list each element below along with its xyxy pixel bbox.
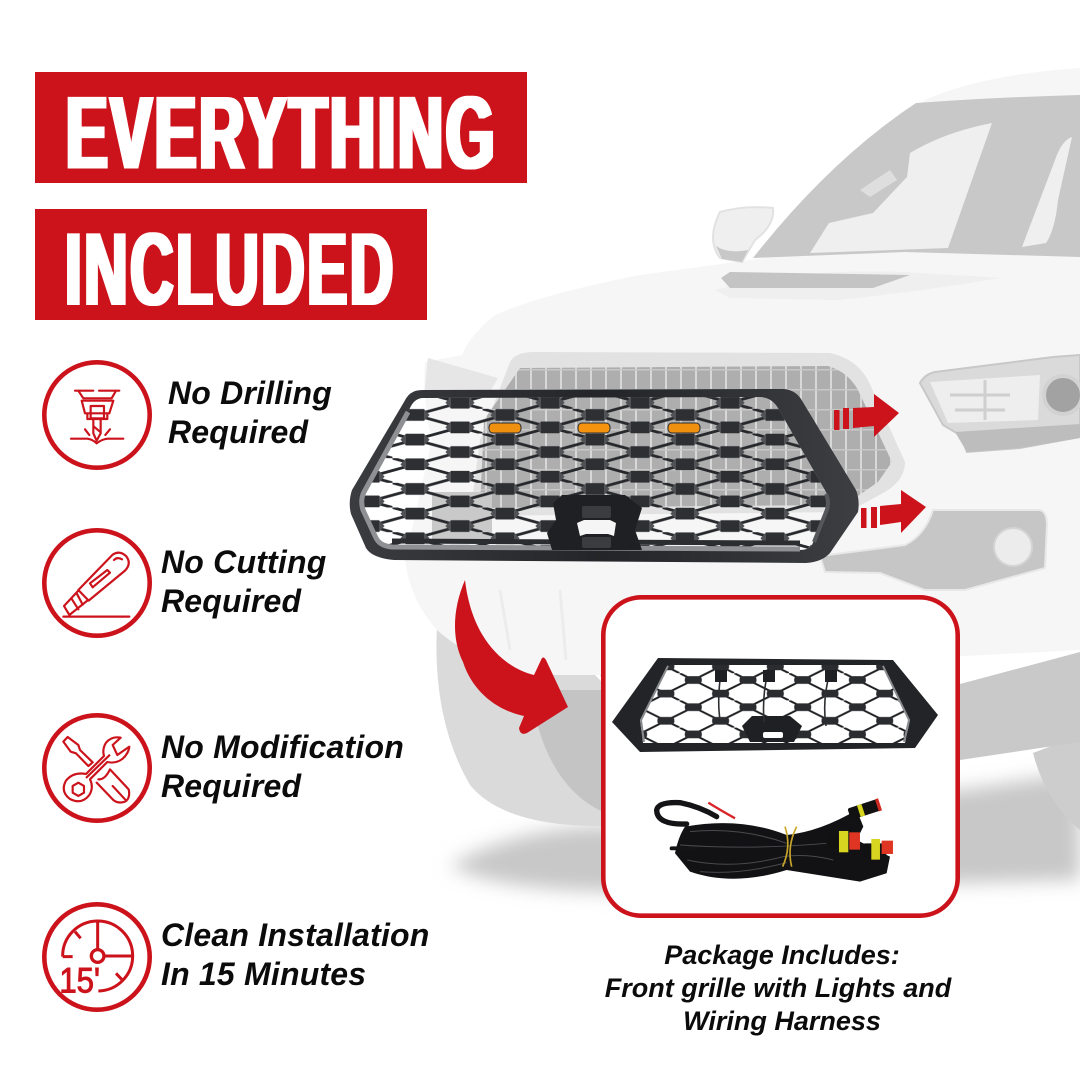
mirror base shade	[716, 246, 748, 262]
harness loose loop	[657, 803, 717, 848]
gold cable ties	[783, 827, 797, 867]
front left tyre	[436, 625, 640, 826]
headlamp chin	[955, 424, 1080, 452]
arrow: lower right	[861, 490, 926, 533]
package grille frame	[612, 658, 938, 752]
amber light left	[489, 423, 521, 433]
cable highlights	[680, 830, 833, 872]
windshield	[753, 95, 1080, 258]
grille lattice	[364, 397, 826, 549]
bumper recess lines	[500, 590, 566, 660]
package caption: Package Includes:	[664, 940, 900, 970]
windshield reflections	[810, 123, 1072, 253]
fog lamp lens	[994, 528, 1032, 566]
badge block top	[582, 506, 611, 518]
right headlamp	[920, 355, 1080, 452]
headlamp projector	[1044, 376, 1080, 414]
right inner lip	[814, 494, 828, 542]
truck background photo (ghosted)	[405, 68, 1080, 892]
feature: no modification	[44, 715, 404, 821]
package caption: Front grille with Lights and	[605, 973, 952, 1003]
label: no cutting: No Cutting	[161, 544, 326, 580]
heading: everything: EVERYTHING	[66, 75, 494, 192]
label: no modification: Required	[161, 768, 303, 804]
label: no drilling: Required	[168, 414, 310, 450]
amber light centre	[578, 423, 610, 433]
headlamp lens details	[950, 380, 1010, 420]
headlamp clear lens	[930, 375, 1040, 423]
light wires	[719, 672, 830, 726]
package grille badge	[742, 716, 802, 742]
truck body silhouette	[405, 68, 1080, 675]
feature: no drilling	[44, 362, 332, 468]
arrow: upper right	[834, 394, 899, 437]
package badge window	[763, 732, 783, 738]
rear-view mirror mount	[860, 170, 897, 197]
left headlamp	[424, 358, 498, 395]
light sockets	[715, 670, 837, 682]
curved arrow to package panel	[455, 580, 568, 734]
inner bottom dark rail	[392, 541, 800, 543]
label: no modification: No Modification	[161, 729, 404, 765]
icon: utility knife	[63, 553, 129, 617]
package grille	[610, 655, 940, 755]
under-bumper dark band	[600, 652, 1080, 760]
connector middle	[827, 831, 860, 852]
right tyre	[1033, 735, 1080, 830]
connector right	[863, 839, 893, 860]
label: no cutting: Required	[161, 583, 303, 619]
package caption: Wiring Harness	[683, 1006, 881, 1036]
grille inner grey lip	[362, 412, 800, 549]
red wire	[708, 803, 735, 818]
label: clean installation: Clean Installation	[161, 917, 430, 953]
connector top	[847, 798, 882, 820]
heading: included: INCLUDED	[65, 212, 393, 328]
icon: wrench and screwdriver	[63, 737, 129, 803]
package grille grey lip	[641, 666, 909, 742]
hood scoop	[721, 272, 910, 288]
icon: drill	[71, 391, 123, 443]
side mirror	[713, 207, 773, 262]
truck grille slats	[480, 366, 892, 508]
wiring harness	[657, 798, 893, 882]
grille product photo	[350, 385, 860, 565]
grille surround	[470, 352, 905, 516]
badge block bottom	[582, 537, 611, 548]
hood bulge shading	[715, 271, 1000, 300]
grille outer frame	[350, 389, 859, 563]
ground shadow	[450, 772, 1080, 892]
icon: clock 15 minutes: 15'	[59, 961, 100, 1000]
panel: package contents	[603, 597, 958, 916]
harness cable mass	[675, 810, 890, 882]
lower intake and fog housing	[820, 510, 1047, 590]
feature: clean installation	[44, 904, 430, 1010]
centre badge mount	[547, 495, 642, 550]
label: clean installation: In 15 Minutes	[161, 956, 366, 992]
label: no drilling: No Drilling	[168, 375, 332, 411]
inner wheel arch	[530, 690, 640, 815]
amber light right	[668, 423, 700, 433]
icon: clock 15 minutes	[59, 921, 133, 1000]
badge window	[577, 520, 616, 536]
feature: no cutting	[44, 530, 327, 636]
ghost lamp behind grille	[432, 492, 492, 540]
